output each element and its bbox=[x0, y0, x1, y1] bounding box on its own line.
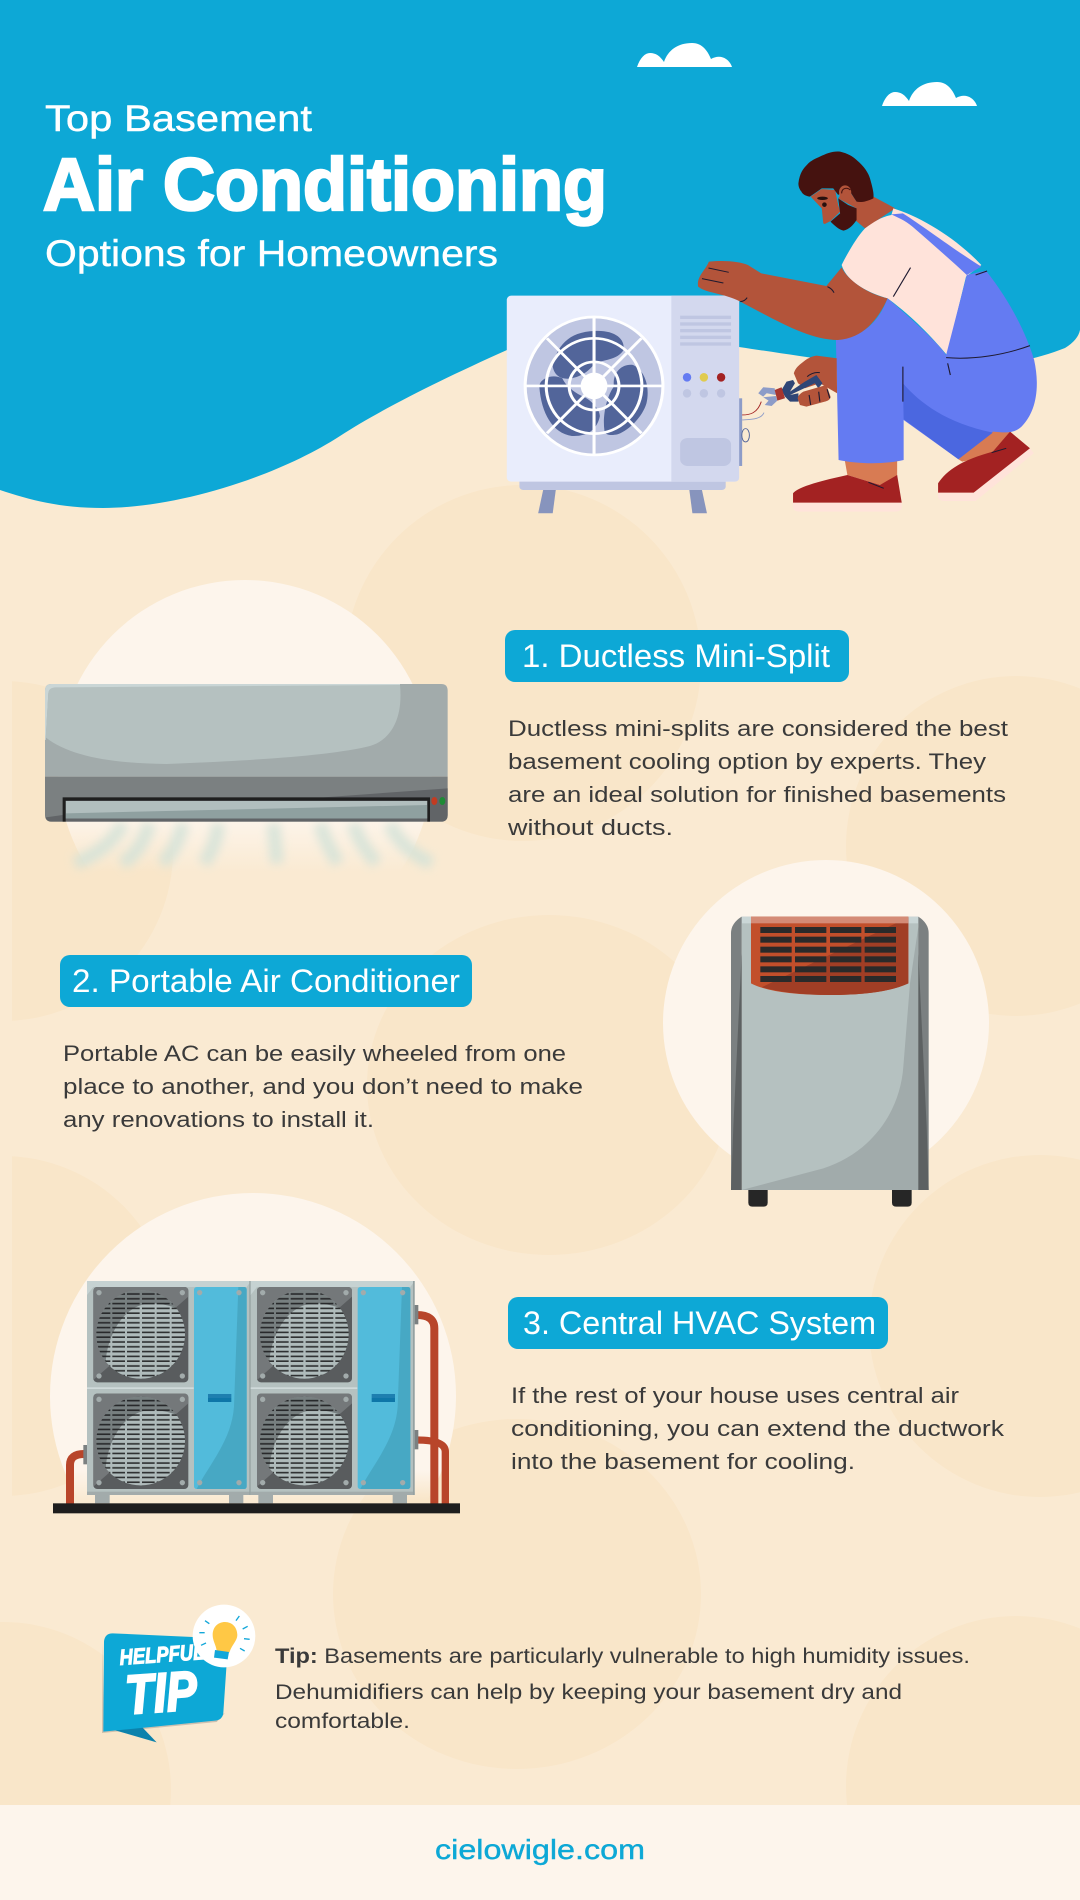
body text: Ductless mini-splits are considered the best bbox=[508, 716, 1008, 741]
finger lines bbox=[807, 372, 830, 405]
left side strip bbox=[731, 917, 742, 1190]
detail lines bbox=[702, 268, 1030, 488]
website: cielowigle.com bbox=[435, 1834, 645, 1865]
pipe connectors bbox=[83, 1305, 418, 1464]
air outlet frame bbox=[63, 797, 430, 822]
title bbox=[43, 98, 607, 274]
hair bbox=[798, 151, 874, 202]
wires bbox=[742, 402, 764, 442]
arm bbox=[698, 261, 888, 340]
AC unit casing bbox=[507, 296, 739, 482]
illustration: outdoor AC unit and technician bbox=[507, 151, 1037, 513]
tip text: Tip: Basements are particularly vulnerable to high humidity issues. bbox=[275, 1645, 970, 1668]
lower band bbox=[45, 777, 448, 822]
section 3: central HVAC system bbox=[508, 1297, 1005, 1474]
AC unit legs bbox=[538, 490, 707, 513]
front leg skin bbox=[845, 460, 897, 485]
technician bbox=[698, 151, 1037, 512]
panel: white circle behind mini-split bbox=[58, 580, 432, 954]
lower band shadow bbox=[46, 788, 448, 822]
badge tail bbox=[112, 1727, 157, 1742]
vent lines bbox=[680, 316, 731, 346]
body text: Portable AC can be easily wheeled from one bbox=[63, 1041, 566, 1066]
lower hand palm bbox=[794, 356, 837, 393]
tip text: Dehumidifiers can help by keeping your basement dry and bbox=[275, 1681, 902, 1704]
body shadow bbox=[742, 927, 918, 1190]
body text bbox=[511, 1383, 1005, 1474]
front shoe bbox=[793, 475, 902, 503]
louver shadow bbox=[66, 805, 427, 818]
platform bbox=[53, 1503, 460, 1513]
pliers bbox=[758, 375, 823, 406]
title line 2: Air Conditioning bbox=[43, 143, 607, 226]
grille slots bbox=[760, 927, 896, 982]
back leg skin bbox=[958, 430, 1029, 462]
overalls shadow bbox=[903, 383, 993, 459]
unit feet bbox=[95, 1495, 407, 1503]
face bbox=[811, 189, 840, 224]
heading pill bbox=[508, 1297, 888, 1349]
body text: without ducts. bbox=[507, 815, 673, 840]
title line 1: Top Basement bbox=[45, 98, 313, 139]
unit body bbox=[45, 684, 448, 777]
heading pill bbox=[505, 630, 849, 682]
red pipes bbox=[70, 1315, 445, 1505]
illustration: central HVAC system bbox=[53, 1281, 460, 1513]
top strip bbox=[742, 917, 918, 923]
body text bbox=[63, 1041, 583, 1132]
ear bbox=[839, 185, 851, 199]
footer bbox=[0, 1805, 1080, 1900]
eye and brow bbox=[817, 197, 828, 207]
icon: cloud left bbox=[637, 43, 732, 67]
tip text: comfortable. bbox=[275, 1710, 410, 1733]
fan bbox=[525, 317, 663, 455]
front shoe sole bbox=[793, 502, 902, 512]
heading: 3. Central HVAC System bbox=[523, 1305, 876, 1341]
section 1: ductless mini-split bbox=[505, 630, 1008, 840]
cool air streaks bbox=[75, 823, 432, 863]
back shoe sole bbox=[938, 448, 1034, 501]
heading pill bbox=[60, 955, 472, 1007]
header wave bbox=[0, 0, 1080, 508]
background circle pattern bbox=[0, 485, 1080, 1900]
body text: place to another, and you don’t need to make bbox=[63, 1074, 583, 1099]
right side shadow bbox=[918, 953, 929, 1190]
red grille panel bbox=[751, 917, 908, 995]
bulb bbox=[213, 1622, 237, 1659]
badge shadow bbox=[102, 1642, 225, 1733]
indicator dots bbox=[683, 373, 725, 398]
body text: into the basement for cooling. bbox=[511, 1449, 855, 1474]
footer band bbox=[0, 1805, 1080, 1900]
icon: helpful tip badge bbox=[102, 1605, 255, 1742]
body text: If the rest of your house uses central air bbox=[511, 1383, 959, 1408]
overall strap bbox=[891, 213, 981, 275]
illustration: ductless mini-split bbox=[45, 684, 448, 863]
right outdoor units bbox=[251, 1281, 415, 1495]
access panel bbox=[680, 438, 731, 466]
bulb rays bbox=[199, 1616, 250, 1651]
overalls bbox=[836, 271, 1037, 463]
AC side panel bbox=[671, 296, 739, 482]
body text: any renovations to install it. bbox=[63, 1107, 374, 1132]
section 2: portable air conditioner bbox=[60, 955, 583, 1132]
tip text bbox=[275, 1645, 970, 1733]
panel: white circle behind central HVAC bbox=[50, 1193, 456, 1599]
panel: white circle behind portable AC bbox=[663, 860, 989, 1186]
body bbox=[742, 917, 918, 1190]
wheels bbox=[748, 1188, 912, 1207]
beard bbox=[831, 198, 857, 231]
shirt bbox=[842, 208, 981, 355]
back shoe bbox=[938, 432, 1030, 493]
badge label: TIP bbox=[123, 1659, 199, 1726]
indicator LEDs bbox=[431, 797, 445, 805]
AC unit base bbox=[519, 477, 726, 490]
body text bbox=[507, 716, 1008, 840]
heading: 1. Ductless Mini-Split bbox=[522, 638, 830, 674]
badge label: HELPFUL bbox=[119, 1639, 205, 1670]
icon: cloud right bbox=[882, 82, 977, 106]
left outdoor units bbox=[87, 1281, 251, 1495]
top highlight bbox=[45, 684, 400, 740]
bulb circle bbox=[193, 1605, 255, 1667]
louver bbox=[66, 801, 427, 818]
left side shadow bbox=[731, 953, 742, 1190]
grille top highlight bbox=[751, 917, 908, 923]
heading: 2. Portable Air Conditioner bbox=[72, 963, 460, 999]
title line 3: Options for Homeowners bbox=[45, 233, 498, 274]
grille shade bbox=[762, 917, 908, 995]
body text: are an ideal solution for finished basements bbox=[508, 782, 1006, 807]
ear line bbox=[842, 188, 850, 193]
front panel highlight bbox=[46, 685, 401, 764]
body text: basement cooling option by experts. They bbox=[508, 749, 986, 774]
neck bbox=[838, 187, 895, 228]
AC side plate bbox=[738, 398, 742, 466]
lower hand fingers bbox=[798, 385, 831, 407]
illustration: portable air conditioner bbox=[731, 917, 929, 1207]
right side strip bbox=[918, 917, 929, 1190]
badge body bbox=[103, 1633, 228, 1732]
body text: conditioning, you can extend the ductwork bbox=[511, 1416, 1005, 1441]
badge label bbox=[119, 1639, 205, 1726]
